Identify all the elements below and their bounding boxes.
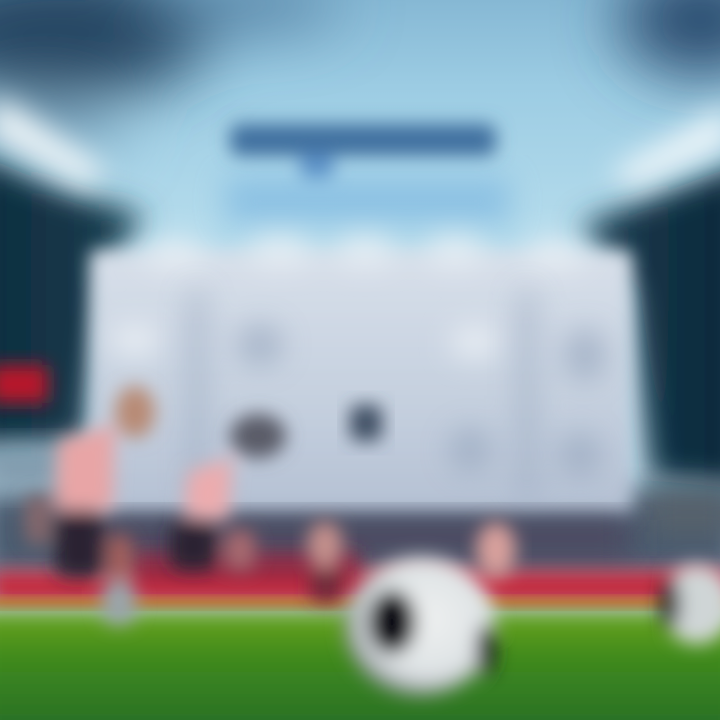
left lower stand [0, 448, 70, 488]
right stand [580, 160, 720, 490]
background player 4 [476, 522, 516, 578]
player 1 [25, 386, 155, 625]
dark band under panel [90, 520, 630, 556]
second football [660, 564, 720, 644]
panel column shading [190, 290, 605, 500]
red side label [0, 365, 48, 403]
right lower stand [645, 490, 720, 535]
main white panel [90, 238, 632, 514]
heading [230, 124, 496, 180]
main football [344, 556, 496, 696]
grass pitch [0, 612, 720, 720]
heading glow [225, 178, 510, 224]
orange band edge [0, 598, 720, 607]
red advertising band [0, 552, 720, 604]
clouds in corners [0, 0, 720, 160]
panel scallop highlights [111, 238, 587, 356]
left stand [0, 150, 145, 450]
stadium lights [0, 100, 720, 190]
player 2 [170, 414, 286, 570]
background player 3 [307, 521, 343, 602]
ground backdrop behind players [0, 490, 720, 580]
panel dark icon [350, 405, 382, 441]
